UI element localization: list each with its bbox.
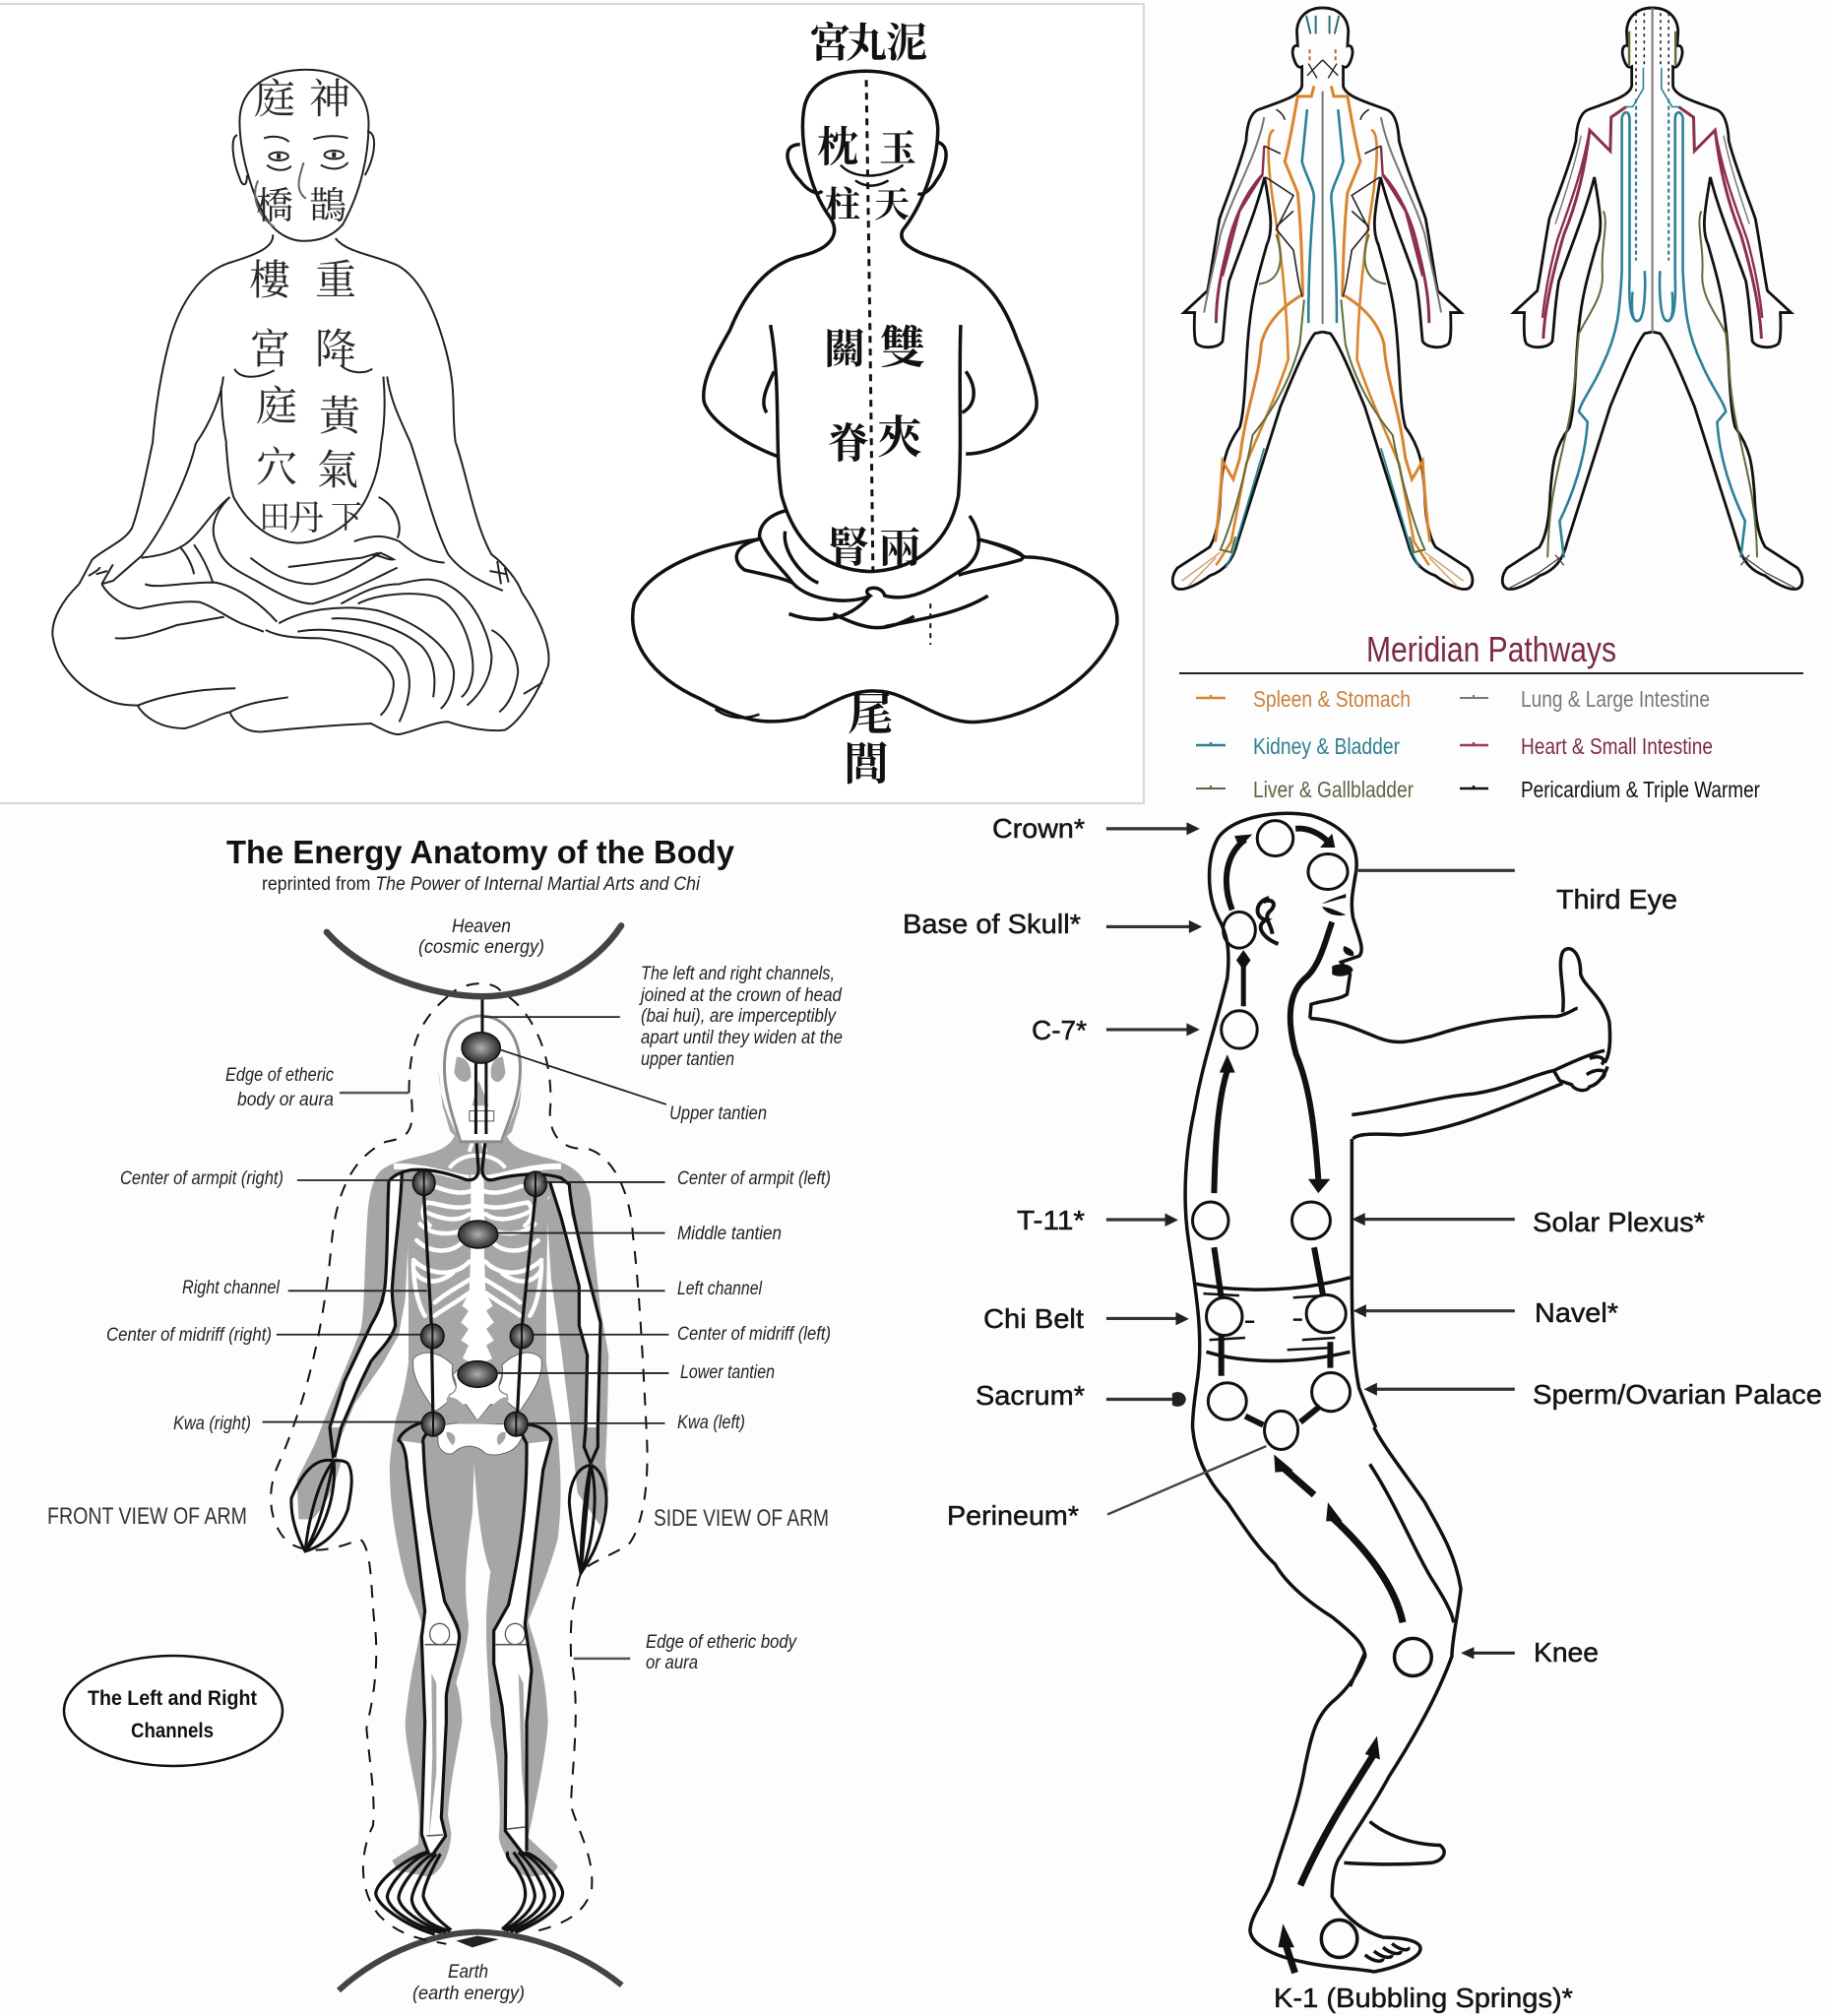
labels: arm views: FRONT VIEW OF ARM xyxy=(47,1503,247,1530)
labels: anatomy annotations: upper tantien xyxy=(641,1049,734,1070)
orbit arrows: upper body xyxy=(1214,829,1353,1425)
calligraphy: front figure labels: 庭 xyxy=(256,385,297,430)
aura: dashed etheric boundary xyxy=(271,983,648,1944)
labels: orbit points: Perineum* xyxy=(947,1500,1079,1531)
legend: Liver & Gallbladder xyxy=(1253,777,1414,802)
figure: leg outline xyxy=(1193,1427,1461,1973)
labels: anatomy annotations: The left and right channels, xyxy=(641,964,835,984)
labels: anatomy annotations: Right channel xyxy=(182,1278,281,1298)
calligraphy: front figure labels: 橋 xyxy=(256,186,293,227)
anatomical figure: head, aura, heaven arc and leader lines xyxy=(263,925,668,1944)
legend xyxy=(1196,686,1760,802)
calligraphy: back figure labels: 關 xyxy=(824,328,865,373)
calligraphy: back figure labels xyxy=(809,21,927,789)
labels: anatomy annotations: Earth xyxy=(448,1962,488,1983)
labels: arm views xyxy=(47,1503,829,1532)
arm views: hand fans xyxy=(291,1457,606,1573)
calligraphy: front figure labels: 田 xyxy=(259,499,290,535)
labels: orbit points: Third Eye xyxy=(1556,884,1677,914)
labels: anatomy annotations: Center of midriff (right) xyxy=(106,1325,272,1346)
calligraphy: front figure labels: 黃 xyxy=(319,395,362,440)
foot channels fanning to earth xyxy=(376,1852,563,1934)
figure: upper body outline xyxy=(1185,813,1610,1427)
figure: meridian body back xyxy=(1502,8,1802,590)
labels: orbit points: Chi Belt xyxy=(983,1303,1084,1334)
calligraphy: back figure labels: 天 xyxy=(874,185,910,224)
channels: black lines through the body xyxy=(330,1132,600,1854)
labels: anatomy annotations: joined at the crown of head xyxy=(638,985,843,1006)
energy centers: middle, lower and side nodes xyxy=(412,1170,546,1436)
body silhouette xyxy=(297,1132,608,1877)
labels: orbit points: Sacrum* xyxy=(975,1380,1085,1411)
panel: microcosmic orbit side figure xyxy=(903,813,1822,2013)
labels: orbit points: Base of Skull* xyxy=(903,909,1081,939)
figure: meridian body front xyxy=(1172,8,1473,590)
labels: orbit points xyxy=(903,813,1822,2013)
labels: orbit points: K-1 (Bubbling Springs)* xyxy=(1274,1983,1573,2013)
callout: the left and right channels: Channels xyxy=(131,1720,214,1742)
labels: anatomy annotations: Left channel xyxy=(677,1279,763,1299)
labels: anatomy annotations: (earth energy) xyxy=(412,1984,525,2004)
labels: anatomy annotations: Heaven xyxy=(452,916,511,937)
white bones of arms and legs xyxy=(330,1173,600,1853)
calligraphy: front figure labels: 降 xyxy=(315,328,356,373)
labels: anatomy annotations: Middle tantien xyxy=(677,1224,782,1244)
calligraphy: back figure labels: 腎 xyxy=(828,526,869,572)
legend: Lung & Large Intestine xyxy=(1521,686,1710,712)
pelvis bone xyxy=(449,1365,507,1420)
callout: the left and right channels: The Left and Right xyxy=(88,1687,257,1710)
labels: anatomy annotations: or aura xyxy=(646,1653,698,1673)
labels: anatomy annotations: Upper tantien xyxy=(669,1103,767,1124)
calligraphy: back figure labels: 雙 xyxy=(880,323,925,373)
figure: back seated meditator xyxy=(633,71,1117,723)
calligraphy: front figure labels: 樓 xyxy=(249,259,291,304)
calligraphy: back figure labels: 脊 xyxy=(828,421,869,468)
calligraphy: back figure labels: 夾 xyxy=(877,412,923,463)
calligraphy: front figure labels: 氣 xyxy=(317,449,358,494)
labels: anatomy annotations: (bai hui), are imperceptibly xyxy=(641,1006,837,1027)
labels: anatomy annotations: (cosmic energy) xyxy=(418,937,544,958)
labels: anatomy annotations: Kwa (right) xyxy=(173,1414,251,1434)
labels: orbit points: Navel* xyxy=(1535,1297,1618,1328)
calligraphy: front figure labels: 重 xyxy=(315,259,356,304)
calligraphy: back figure labels: 丸 xyxy=(846,22,887,67)
calligraphy: back figure labels: 宮 xyxy=(809,21,850,67)
title: The Energy Anatomy of the Body xyxy=(226,834,735,870)
labels: orbit points: T-11* xyxy=(1017,1205,1085,1235)
calligraphy: back figure labels: 柱 xyxy=(825,185,860,224)
calligraphy: back figure labels: 兩 xyxy=(879,527,920,572)
panel: traditional seated figures xyxy=(0,4,1144,803)
earth arc xyxy=(339,1932,622,1990)
calligraphy: front figure labels: 神 xyxy=(309,78,350,123)
leader lines xyxy=(263,1017,668,1659)
labels: anatomy annotations: Center of armpit (left) xyxy=(677,1168,831,1189)
leader arrows: lower leg xyxy=(1107,1446,1515,1659)
callout: the left and right channels xyxy=(64,1656,283,1766)
panel: energy anatomy of the body xyxy=(47,834,843,2004)
calligraphy: front figure labels: 宮 xyxy=(249,328,290,373)
calligraphy: front figure labels: 下 xyxy=(331,499,362,535)
labels: orbit points: C-7* xyxy=(1032,1015,1087,1045)
labels: orbit points: Knee xyxy=(1534,1637,1599,1668)
calligraphy: back figure labels: 泥 xyxy=(886,22,927,67)
labels: anatomy annotations: Center of midriff (left) xyxy=(677,1324,831,1345)
labels: anatomy annotations: body or aura xyxy=(237,1090,334,1110)
labels: anatomy annotations: Edge of etheric xyxy=(225,1065,334,1086)
calligraphy: back figure labels: 枕 xyxy=(817,125,858,171)
calligraphy: front figure labels xyxy=(249,78,362,537)
orbit points: circles xyxy=(1193,821,1351,1450)
calligraphy: back figure labels: 閭 xyxy=(844,739,889,789)
panel: meridian pathways chart xyxy=(1172,8,1803,802)
labels: anatomy annotations: Center of armpit (right) xyxy=(120,1168,283,1189)
figure: front seated meditator upper body xyxy=(153,70,456,443)
labels: arm views: SIDE VIEW OF ARM xyxy=(654,1505,829,1532)
labels: anatomy annotations: apart until they widen at the xyxy=(641,1028,843,1048)
calligraphy: front figure labels: 穴 xyxy=(256,446,297,491)
labels: anatomy annotations: Lower tantien xyxy=(680,1362,775,1383)
labels: orbit points: Crown* xyxy=(992,813,1085,844)
anatomical figure: body, skeleton and channels xyxy=(291,1132,622,1990)
legend: Pericardium & Triple Warmer xyxy=(1521,777,1760,802)
labels: anatomy annotations xyxy=(106,916,843,2004)
head and skull xyxy=(439,999,524,1142)
heaven arc xyxy=(327,925,621,996)
labels: anatomy annotations: Edge of etheric body xyxy=(646,1632,797,1653)
subtitle: reprinted from The Power of Internal Martial Arts and Chi xyxy=(262,874,701,895)
leader arrows: upper labels xyxy=(1106,822,1515,1407)
calligraphy: back figure labels: 玉 xyxy=(879,129,916,170)
legend: Spleen & Stomach xyxy=(1253,686,1411,712)
legend: Kidney & Bladder xyxy=(1253,733,1400,759)
upper tantien xyxy=(462,1033,500,1063)
calligraphy: front figure labels: 鵲 xyxy=(309,186,346,227)
labels: orbit points: Solar Plexus* xyxy=(1533,1207,1705,1237)
labels: anatomy annotations: Kwa (left) xyxy=(677,1413,745,1433)
calligraphy: front figure labels: 丹 xyxy=(288,498,324,537)
ribcage, spine and pelvis xyxy=(394,1142,477,1411)
legend: Heart & Small Intestine xyxy=(1521,733,1713,759)
figure: front seated meditator robe and legs xyxy=(52,443,548,734)
calligraphy: front figure labels: 庭 xyxy=(254,78,295,123)
labels: orbit points: Sperm/Ovarian Palace xyxy=(1533,1379,1822,1410)
calligraphy: back figure labels: 尾 xyxy=(848,689,893,739)
heading: Meridian Pathways: Meridian Pathways xyxy=(1366,629,1616,669)
